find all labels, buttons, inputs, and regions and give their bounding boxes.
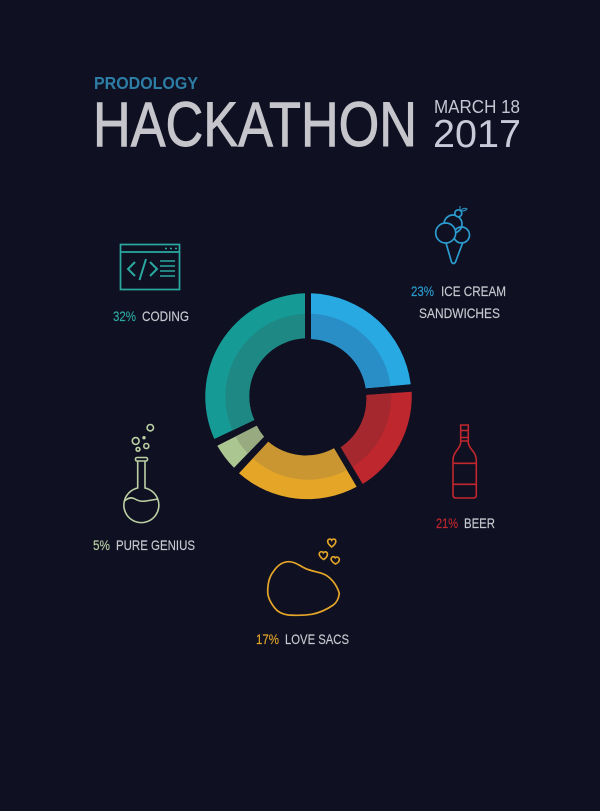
label: coding [113,308,189,324]
label: pure genius: 5% [93,537,110,553]
year: 2017 [433,113,521,156]
label: ice cream sandwiches: SANDWICHES [419,305,500,321]
date: MARCH 18 [434,97,520,117]
label: ice cream sandwiches: ICE CREAM [441,283,506,299]
label: coding: CODING [142,308,189,324]
title block [93,73,521,160]
icon: flask [124,424,159,523]
brand heading: PRODOLOGY [94,73,198,93]
segment: coding 32% [205,293,305,439]
label: ice cream sandwiches: 23% [411,283,434,299]
icon: code window [120,244,180,290]
segment: beer 21% [340,392,412,484]
donut chart [205,293,412,500]
label: ice cream sandwiches [411,283,506,321]
segment: pure genius 5% [217,426,264,468]
label: beer: 21% [436,515,458,531]
label: love sacs: LOVE SACS [285,631,349,647]
label: pure genius [93,537,195,553]
icon: ice cream [436,206,470,264]
label: beer: BEER [464,515,495,531]
icon: beer bottle [453,425,476,498]
label: love sacs [256,631,349,647]
label: pure genius: PURE GENIUS [116,537,195,553]
label: love sacs: 17% [256,631,279,647]
segment: love sacs 17% [239,442,357,500]
label: coding: 32% [113,308,136,324]
label: beer [436,515,495,531]
segment: ice cream 23% [311,293,411,388]
main title: HACKATHON [93,90,417,160]
icon: love sac with hearts [268,539,339,615]
